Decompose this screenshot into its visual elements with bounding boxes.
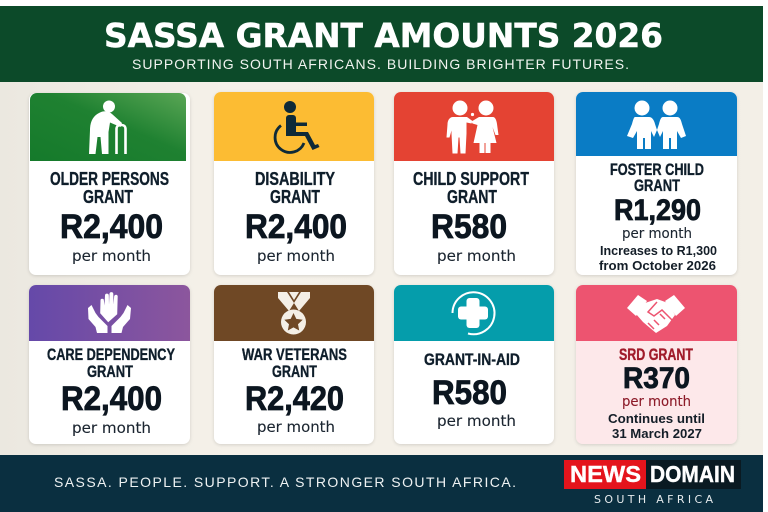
amount: R580 bbox=[432, 374, 507, 412]
note: Increases to R1,300 bbox=[600, 243, 717, 258]
grant name: SRD GRANT bbox=[619, 345, 693, 364]
card header teal bbox=[394, 285, 554, 341]
amount: R2,420 bbox=[245, 380, 344, 418]
grant name bbox=[242, 345, 347, 381]
period: per month bbox=[257, 418, 335, 436]
grant name: GRANT bbox=[634, 177, 680, 195]
icon: two foster children bbox=[627, 100, 686, 149]
card header red bbox=[394, 92, 554, 161]
grant name: DISABILITY bbox=[255, 169, 335, 189]
period: per month bbox=[72, 419, 151, 437]
grant name: WAR VETERANS bbox=[242, 345, 347, 364]
logo: News Domain: DOMAIN bbox=[650, 461, 735, 487]
icon: two children bbox=[446, 100, 498, 154]
icon: medal bbox=[278, 292, 310, 334]
grant name: CHILD SUPPORT bbox=[413, 169, 529, 189]
panel: grant-in-aid bbox=[394, 285, 554, 444]
period: per month bbox=[622, 394, 691, 410]
header banner bbox=[0, 6, 763, 82]
panel: care dependency grant bbox=[29, 285, 190, 444]
grant name: GRANT bbox=[447, 187, 497, 207]
icon: older person with walker bbox=[89, 100, 126, 154]
amount: R2,400 bbox=[60, 208, 163, 246]
grant name bbox=[255, 169, 335, 207]
grant name: GRANT bbox=[272, 362, 317, 381]
note: 31 March 2027 bbox=[612, 426, 702, 441]
grant name: GRANT bbox=[270, 187, 320, 207]
period: per month bbox=[257, 247, 335, 265]
card header green bbox=[30, 93, 186, 161]
icon: handshake bbox=[627, 295, 685, 333]
footer band bbox=[0, 455, 763, 512]
card header pink bbox=[576, 285, 737, 341]
grant name: GRANT-IN-AID bbox=[424, 350, 520, 369]
grant name: GRANT bbox=[87, 362, 133, 381]
icon: medical cross bbox=[452, 292, 494, 334]
grant name: CARE DEPENDENCY bbox=[47, 345, 175, 364]
card header brown bbox=[214, 285, 374, 341]
period: per month bbox=[622, 226, 692, 242]
card header purple bbox=[29, 285, 190, 341]
note bbox=[608, 411, 705, 441]
amount: R370 bbox=[623, 362, 690, 395]
logo: News Domain: SOUTH AFRICA bbox=[594, 493, 713, 506]
grant name bbox=[47, 345, 175, 381]
grant name: OLDER PERSONS bbox=[50, 169, 169, 189]
grant name bbox=[50, 169, 169, 207]
icon: caring hands bbox=[88, 292, 131, 333]
period: per month bbox=[437, 412, 516, 430]
period: per month bbox=[72, 247, 151, 265]
panel: war veterans grant bbox=[214, 285, 374, 444]
logo: News Domain: NEWS bbox=[570, 461, 641, 487]
grant name: GRANT bbox=[83, 187, 133, 207]
grant name bbox=[610, 161, 704, 195]
panel: foster child grant bbox=[576, 92, 737, 275]
amount: R1,290 bbox=[614, 194, 701, 227]
card header yellow bbox=[214, 92, 374, 161]
note bbox=[599, 243, 717, 273]
subtitle: SUPPORTING SOUTH AFRICANS. BUILDING BRIGHTER FUTURES. bbox=[132, 56, 629, 72]
page background bbox=[0, 82, 763, 455]
grant name: FOSTER CHILD bbox=[610, 161, 704, 179]
grant name bbox=[413, 169, 529, 207]
panel: SRD grant bbox=[576, 285, 737, 444]
note: Continues until bbox=[608, 411, 705, 426]
note: from October 2026 bbox=[599, 258, 716, 273]
card header blue bbox=[576, 92, 737, 156]
icon: wheelchair bbox=[275, 101, 320, 152]
title: SASSA GRANT AMOUNTS 2026 bbox=[104, 16, 663, 55]
amount: R2,400 bbox=[61, 380, 162, 418]
period: per month bbox=[437, 247, 516, 265]
amount: R2,400 bbox=[245, 208, 347, 246]
panel: child support grant bbox=[394, 92, 554, 275]
logo: News Domain bbox=[564, 460, 741, 506]
panel: disability grant bbox=[214, 92, 374, 275]
amount: R580 bbox=[431, 208, 507, 246]
panel: older persons grant bbox=[29, 93, 190, 275]
slogan: SASSA. PEOPLE. SUPPORT. A STRONGER SOUTH AFRICA. bbox=[54, 474, 516, 490]
